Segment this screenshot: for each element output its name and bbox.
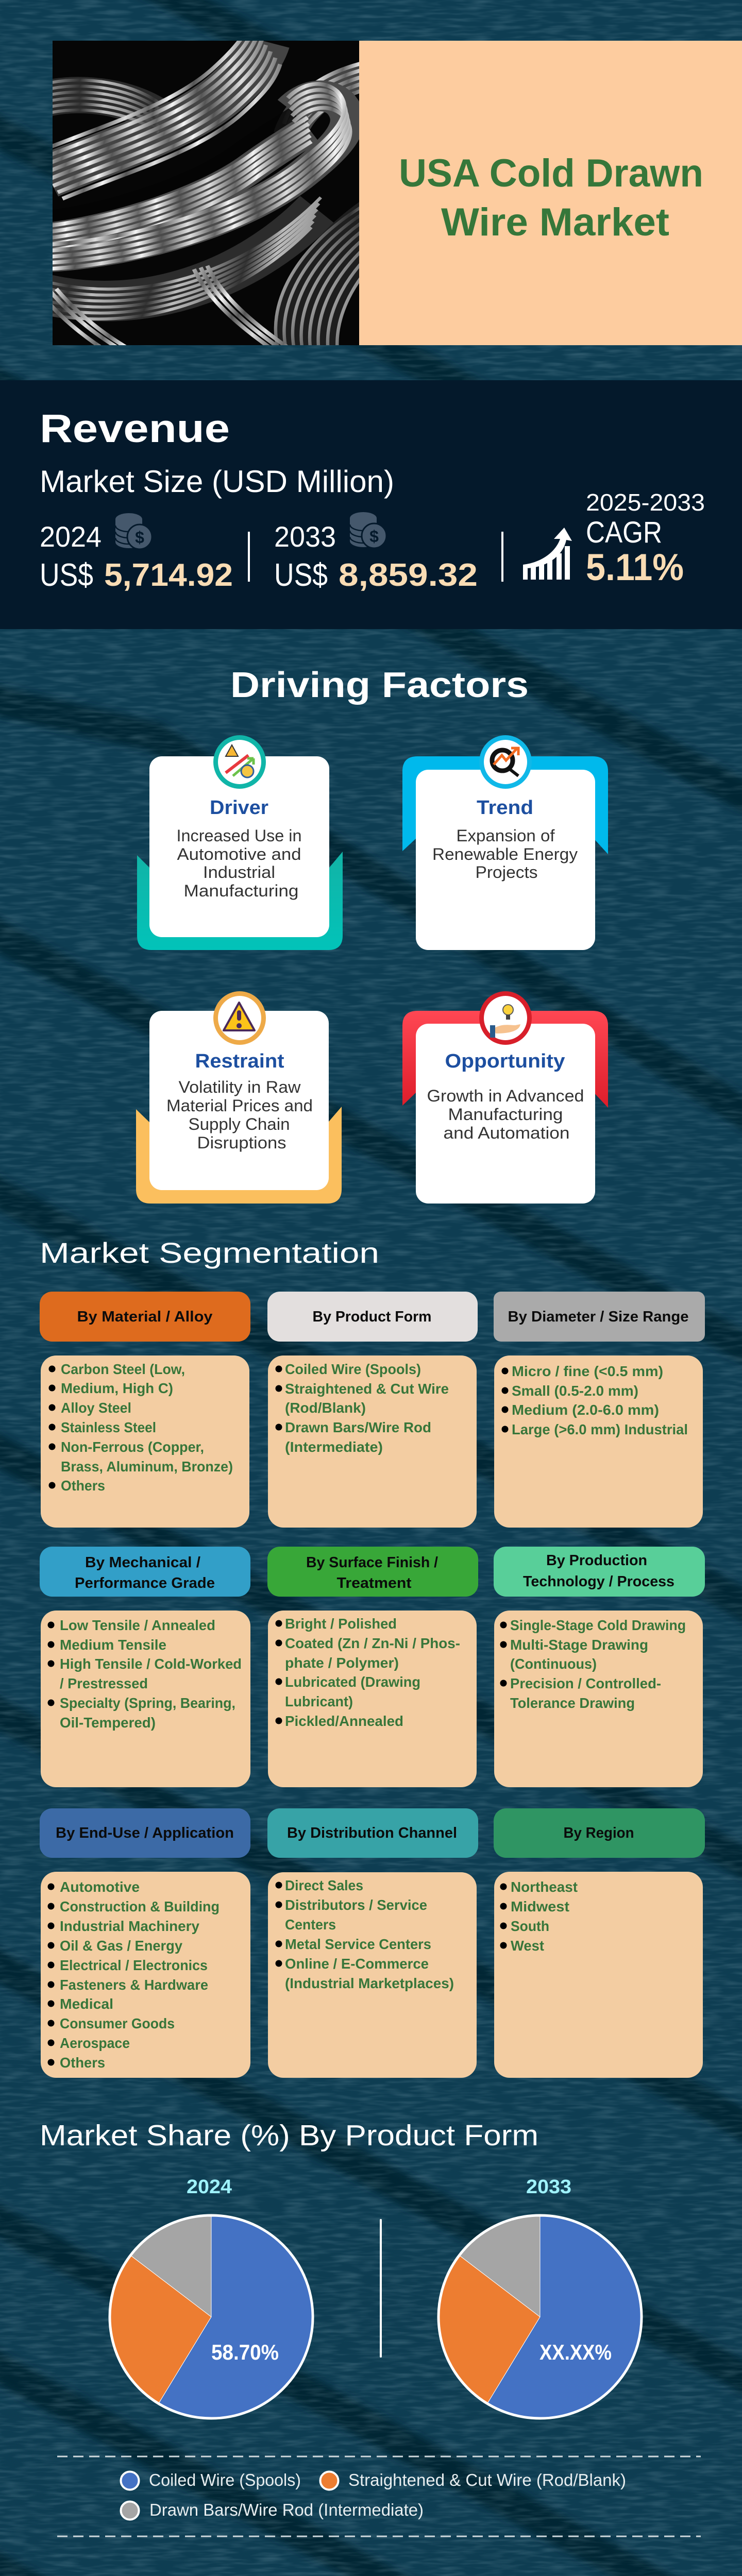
trend heading: Trend [477, 797, 533, 819]
trend text [432, 826, 578, 882]
list: Large (>6.0 mm) Industrial [512, 1421, 688, 1437]
list: Others [60, 2055, 105, 2071]
icon: coin stack 2033 [350, 512, 386, 548]
header: By Distribution Channel [287, 1825, 457, 1841]
header [494, 1547, 705, 1597]
header [267, 1547, 478, 1597]
opportunity text [427, 1087, 584, 1142]
segment: by distribution channel [267, 1808, 478, 2078]
list: Medium (2.0-6.0 mm) [512, 1402, 659, 1418]
list: Medical [60, 1996, 113, 2012]
list: Medium, High C) [61, 1380, 173, 1396]
hero photo: coiled steel wire [53, 41, 359, 345]
driver text: Industrial [203, 863, 275, 882]
card: restraint [136, 991, 342, 1204]
list: Distributors / Service [285, 1897, 427, 1913]
list: (Continuous) [510, 1656, 597, 1672]
list: Coiled Wire (Spools) [285, 1361, 421, 1377]
list [268, 1355, 477, 1528]
list: Stainless Steel [61, 1419, 156, 1435]
header [40, 1547, 250, 1597]
list: Non-Ferrous (Copper, [61, 1439, 204, 1455]
2033 revenue figure: 8,859.32 [339, 557, 478, 593]
trend text: Renewable Energy [432, 845, 578, 863]
list: Pickled/Annealed [285, 1713, 403, 1729]
title panel [359, 41, 742, 345]
list: Consumer Goods [60, 2015, 175, 2031]
title panel: Wire Market [441, 200, 669, 244]
icon: coin stack 2024: $ [135, 528, 144, 547]
header: Technology / Process [523, 1573, 674, 1590]
pie chart: product form 2033 [437, 2214, 643, 2419]
list: Low Tensile / Annealed [60, 1617, 215, 1633]
list: Alloy Steel [61, 1400, 131, 1416]
year label 2024: 2024 [187, 2176, 232, 2198]
icon: trend [479, 735, 532, 789]
list: Bright / Polished [285, 1616, 397, 1632]
2024 revenue figure: 2024 [40, 520, 102, 553]
2033 revenue figure: 2033 [274, 520, 336, 553]
header: By Material / Alloy [77, 1309, 212, 1325]
icon: coin stack 2024 [115, 513, 152, 549]
icon: driver [213, 735, 266, 789]
list: Lubricated (Drawing [285, 1674, 420, 1690]
header [267, 1808, 478, 1858]
divider [248, 532, 250, 582]
restraint text: Material Prices and [166, 1096, 313, 1115]
list: High Tensile / Cold-Worked [60, 1656, 242, 1672]
list [494, 1611, 703, 1787]
restraint heading: Restraint [195, 1050, 284, 1072]
header: Performance Grade [75, 1575, 215, 1591]
list: Others [61, 1478, 105, 1494]
revenue band [0, 380, 742, 629]
header: By Region [564, 1825, 634, 1841]
header [494, 1292, 705, 1342]
header: By End-Use / Application [56, 1825, 234, 1841]
list: Automotive [60, 1879, 140, 1895]
list: Small (0.5-2.0 mm) [512, 1383, 638, 1399]
2033 revenue figure [274, 520, 478, 593]
list: Oil-Tempered) [60, 1715, 156, 1731]
legend: product form [57, 2456, 701, 2536]
driver heading: Driver [210, 797, 268, 819]
restraint text: Supply Chain [189, 1115, 290, 1133]
list: Direct Sales [285, 1877, 363, 1893]
year label 2033: 2033 [526, 2176, 571, 2198]
list: (Intermediate) [285, 1439, 383, 1455]
icon: coin stack 2033: $ [369, 527, 379, 546]
list: Brass, Aluminum, Bronze) [61, 1459, 233, 1475]
legend: product form: Drawn Bars/Wire Rod (Intermediate) [149, 2500, 424, 2519]
header: Treatment [337, 1575, 412, 1591]
2024 revenue figure: 5,714.92 [104, 557, 233, 593]
header [494, 1808, 705, 1858]
opportunity heading: Opportunity [445, 1050, 565, 1072]
card: opportunity [402, 991, 608, 1204]
list: Single-Stage Cold Drawing [510, 1617, 686, 1633]
2024 revenue figure [40, 520, 233, 593]
CAGR figure: CAGR [586, 516, 662, 549]
list: phate / Polymer) [285, 1655, 399, 1671]
card: driver [137, 735, 343, 950]
list: Drawn Bars/Wire Rod [285, 1419, 431, 1435]
list: Tolerance Drawing [510, 1695, 635, 1711]
list: Midwest [511, 1899, 569, 1914]
restraint text: Disruptions [197, 1133, 286, 1152]
icon: growth chart with arrow [523, 528, 572, 580]
legend: product form: Straightened & Cut Wire (Rod/Blank) [348, 2470, 626, 2489]
list: Northeast [511, 1879, 578, 1895]
heading: driving factors: Driving Factors [230, 665, 529, 705]
list [268, 1872, 477, 2078]
list: Aerospace [60, 2035, 130, 2051]
list [41, 1611, 250, 1787]
restraint text [166, 1078, 313, 1152]
list: West [511, 1938, 544, 1954]
list: Coated (Zn / Zn-Ni / Phos- [285, 1635, 460, 1651]
restraint text: Volatility in Raw [178, 1078, 301, 1096]
list: Electrical / Electronics [60, 1957, 208, 1973]
header: By Mechanical / [85, 1554, 200, 1571]
pie chart: product form 2033: XX.XX% [539, 2340, 612, 2364]
segment: by mechanical / performance grade [40, 1547, 250, 1787]
segment: by production technology / process [494, 1547, 705, 1787]
card: trend [402, 735, 608, 950]
title panel: USA Cold Drawn [399, 151, 703, 195]
CAGR figure: 2025-2033 [586, 489, 705, 516]
segment: by product form [267, 1292, 478, 1528]
list [41, 1872, 250, 2078]
header: By Product Form [312, 1309, 432, 1325]
trend text: Projects [475, 863, 538, 882]
header: By Production [546, 1552, 647, 1569]
segment: by region [494, 1808, 705, 2078]
pie chart: product form 2024: 58.70% [211, 2340, 279, 2364]
pie chart: product form 2024 [109, 2214, 314, 2419]
list: Industrial Machinery [60, 1918, 199, 1934]
icon: opportunity [479, 991, 532, 1045]
list: Construction & Building [60, 1899, 220, 1914]
segment: by end-use / application [40, 1808, 250, 2078]
header [40, 1808, 250, 1858]
legend: product form: Coiled Wire (Spools) [149, 2470, 301, 2489]
trend text: Expansion of [457, 826, 555, 845]
list: Fasteners & Hardware [60, 1977, 208, 1993]
list: Specialty (Spring, Bearing, [60, 1695, 235, 1711]
divider [501, 532, 503, 582]
pie divider [380, 2219, 382, 2358]
revenue heading: Revenue [40, 406, 230, 451]
list: Oil & Gas / Energy [60, 1938, 182, 1954]
opportunity text: and Automation [443, 1124, 570, 1142]
2024 revenue figure: US$ [40, 557, 93, 593]
list: South [511, 1918, 549, 1934]
segment: by material / alloy [40, 1292, 250, 1528]
list: Lubricant) [285, 1693, 353, 1709]
list: Precision / Controlled- [510, 1675, 661, 1691]
list: Carbon Steel (Low, [61, 1361, 185, 1377]
list: Online / E-Commerce [285, 1956, 429, 1972]
hero banner [33, 20, 742, 367]
list [41, 1355, 249, 1528]
market size label: Market Size (USD Million) [40, 464, 394, 499]
list: Straightened & Cut Wire [285, 1381, 449, 1397]
opportunity text: Growth in Advanced [427, 1087, 584, 1105]
header: By Surface Finish / [306, 1554, 438, 1571]
list: Metal Service Centers [285, 1936, 431, 1952]
list [494, 1872, 703, 2078]
header [267, 1292, 478, 1342]
list: (Industrial Marketplaces) [285, 1975, 454, 1991]
list [268, 1611, 477, 1787]
CAGR figure [586, 489, 705, 588]
heading: market segmentation: Market Segmentation [40, 1236, 379, 1269]
list [494, 1355, 703, 1528]
heading: market share by product form: Market Share (%) By Product Form [40, 2119, 538, 2152]
driver text: Manufacturing [183, 882, 299, 900]
opportunity text: Manufacturing [448, 1105, 563, 1124]
driver text: Increased Use in [176, 826, 302, 845]
list: Centers [285, 1917, 336, 1933]
header [40, 1292, 250, 1342]
list: Medium Tensile [60, 1637, 166, 1653]
header: By Diameter / Size Range [508, 1309, 688, 1325]
2033 revenue figure: US$ [274, 557, 328, 593]
list: (Rod/Blank) [285, 1400, 366, 1416]
driver text [176, 826, 302, 900]
CAGR figure: 5.11% [586, 547, 684, 588]
list: Multi-Stage Drawing [510, 1637, 648, 1653]
icon: restraint warning [213, 991, 266, 1045]
list: / Prestressed [60, 1675, 148, 1691]
driver text: Automotive and [177, 845, 301, 863]
segment: by diameter / size range [494, 1292, 705, 1528]
segment: by surface finish / treatment [267, 1547, 478, 1787]
list: Micro / fine (<0.5 mm) [512, 1363, 663, 1379]
